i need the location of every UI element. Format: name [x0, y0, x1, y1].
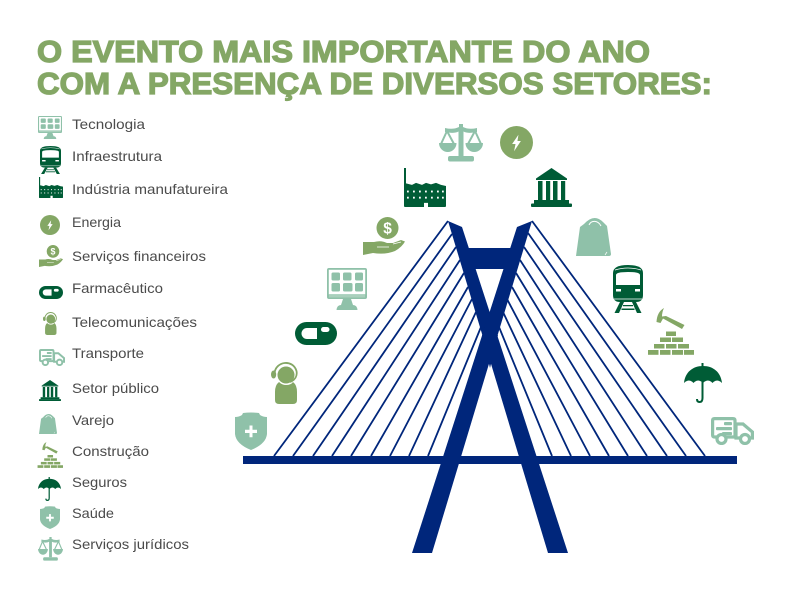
title: O EVENTO MAIS IMPORTANTE DO ANO	[37, 34, 650, 69]
title: COM A PRESENÇA DE DIVERSOS SETORES:	[37, 66, 712, 101]
legend item: Telecomunicações	[43, 313, 197, 335]
legend of sectors	[38, 116, 228, 561]
arc of sector icons	[235, 124, 752, 450]
legend item: Tecnologia: Tecnologia	[72, 116, 145, 132]
icon: hammer and bricks (construção)	[648, 308, 694, 355]
legend item: Energia: Energia	[72, 214, 121, 230]
icon: scales (serviços jurídicos)	[439, 124, 483, 162]
legend item: Serviços financeiros	[39, 245, 206, 267]
legend item: Farmacêutico: Farmacêutico	[72, 280, 163, 296]
icon: truck (transporte)	[713, 419, 752, 444]
legend item: Telecomunicações: Telecomunicações	[72, 314, 197, 330]
icon: monitor (tecnologia)	[327, 268, 367, 310]
icon: factory (indústria)	[404, 168, 446, 207]
legend item: Serviços jurídicos	[38, 536, 189, 561]
icon: pill (farmacêutico)	[295, 322, 337, 345]
legend item: Saúde	[40, 505, 114, 529]
legend item: Construção	[38, 442, 149, 468]
icon: umbrella (seguros)	[684, 363, 722, 402]
legend item: Infraestrutura	[40, 146, 162, 174]
legend item: Transporte: Transporte	[72, 345, 144, 361]
legend item: Tecnologia	[38, 116, 145, 139]
legend item: Indústria manufatureira	[39, 177, 228, 198]
legend item: Setor público: Setor público	[72, 380, 159, 396]
icon: bank (setor público)	[531, 168, 572, 207]
right cables	[499, 221, 705, 456]
bridge tower	[412, 221, 568, 553]
legend item: Varejo: Varejo	[72, 412, 114, 428]
legend item: Construção: Construção	[72, 443, 149, 459]
bridge deck	[243, 456, 737, 464]
bridge illustration	[243, 221, 737, 553]
legend item: Serviços jurídicos: Serviços jurídicos	[72, 536, 189, 552]
title	[37, 34, 712, 101]
icon: shopping bag (varejo)	[576, 218, 611, 256]
legend item: Infraestrutura: Infraestrutura	[72, 148, 162, 164]
icon: hand with coin (serviços financeiros)	[363, 217, 405, 255]
left cables	[274, 221, 481, 456]
legend item: Serviços financeiros: Serviços financeiros	[72, 248, 206, 264]
legend item: Seguros: Seguros	[72, 474, 127, 490]
legend item: Indústria manufatureira: Indústria manufatureira	[72, 181, 228, 197]
icon: shield (saúde)	[235, 412, 267, 450]
legend item: Transporte	[40, 345, 144, 365]
legend item: Varejo	[39, 412, 114, 434]
legend item: Saúde: Saúde	[72, 505, 114, 521]
icon: train (infraestrutura)	[613, 265, 643, 313]
icon: energy bolt (energia)	[500, 126, 533, 159]
legend item: Energia	[40, 214, 121, 235]
legend item: Farmacêutico	[39, 280, 163, 299]
legend item: Seguros	[38, 474, 127, 500]
legend item: Setor público	[39, 380, 159, 401]
icon: headset (telecomunicações)	[271, 363, 297, 404]
